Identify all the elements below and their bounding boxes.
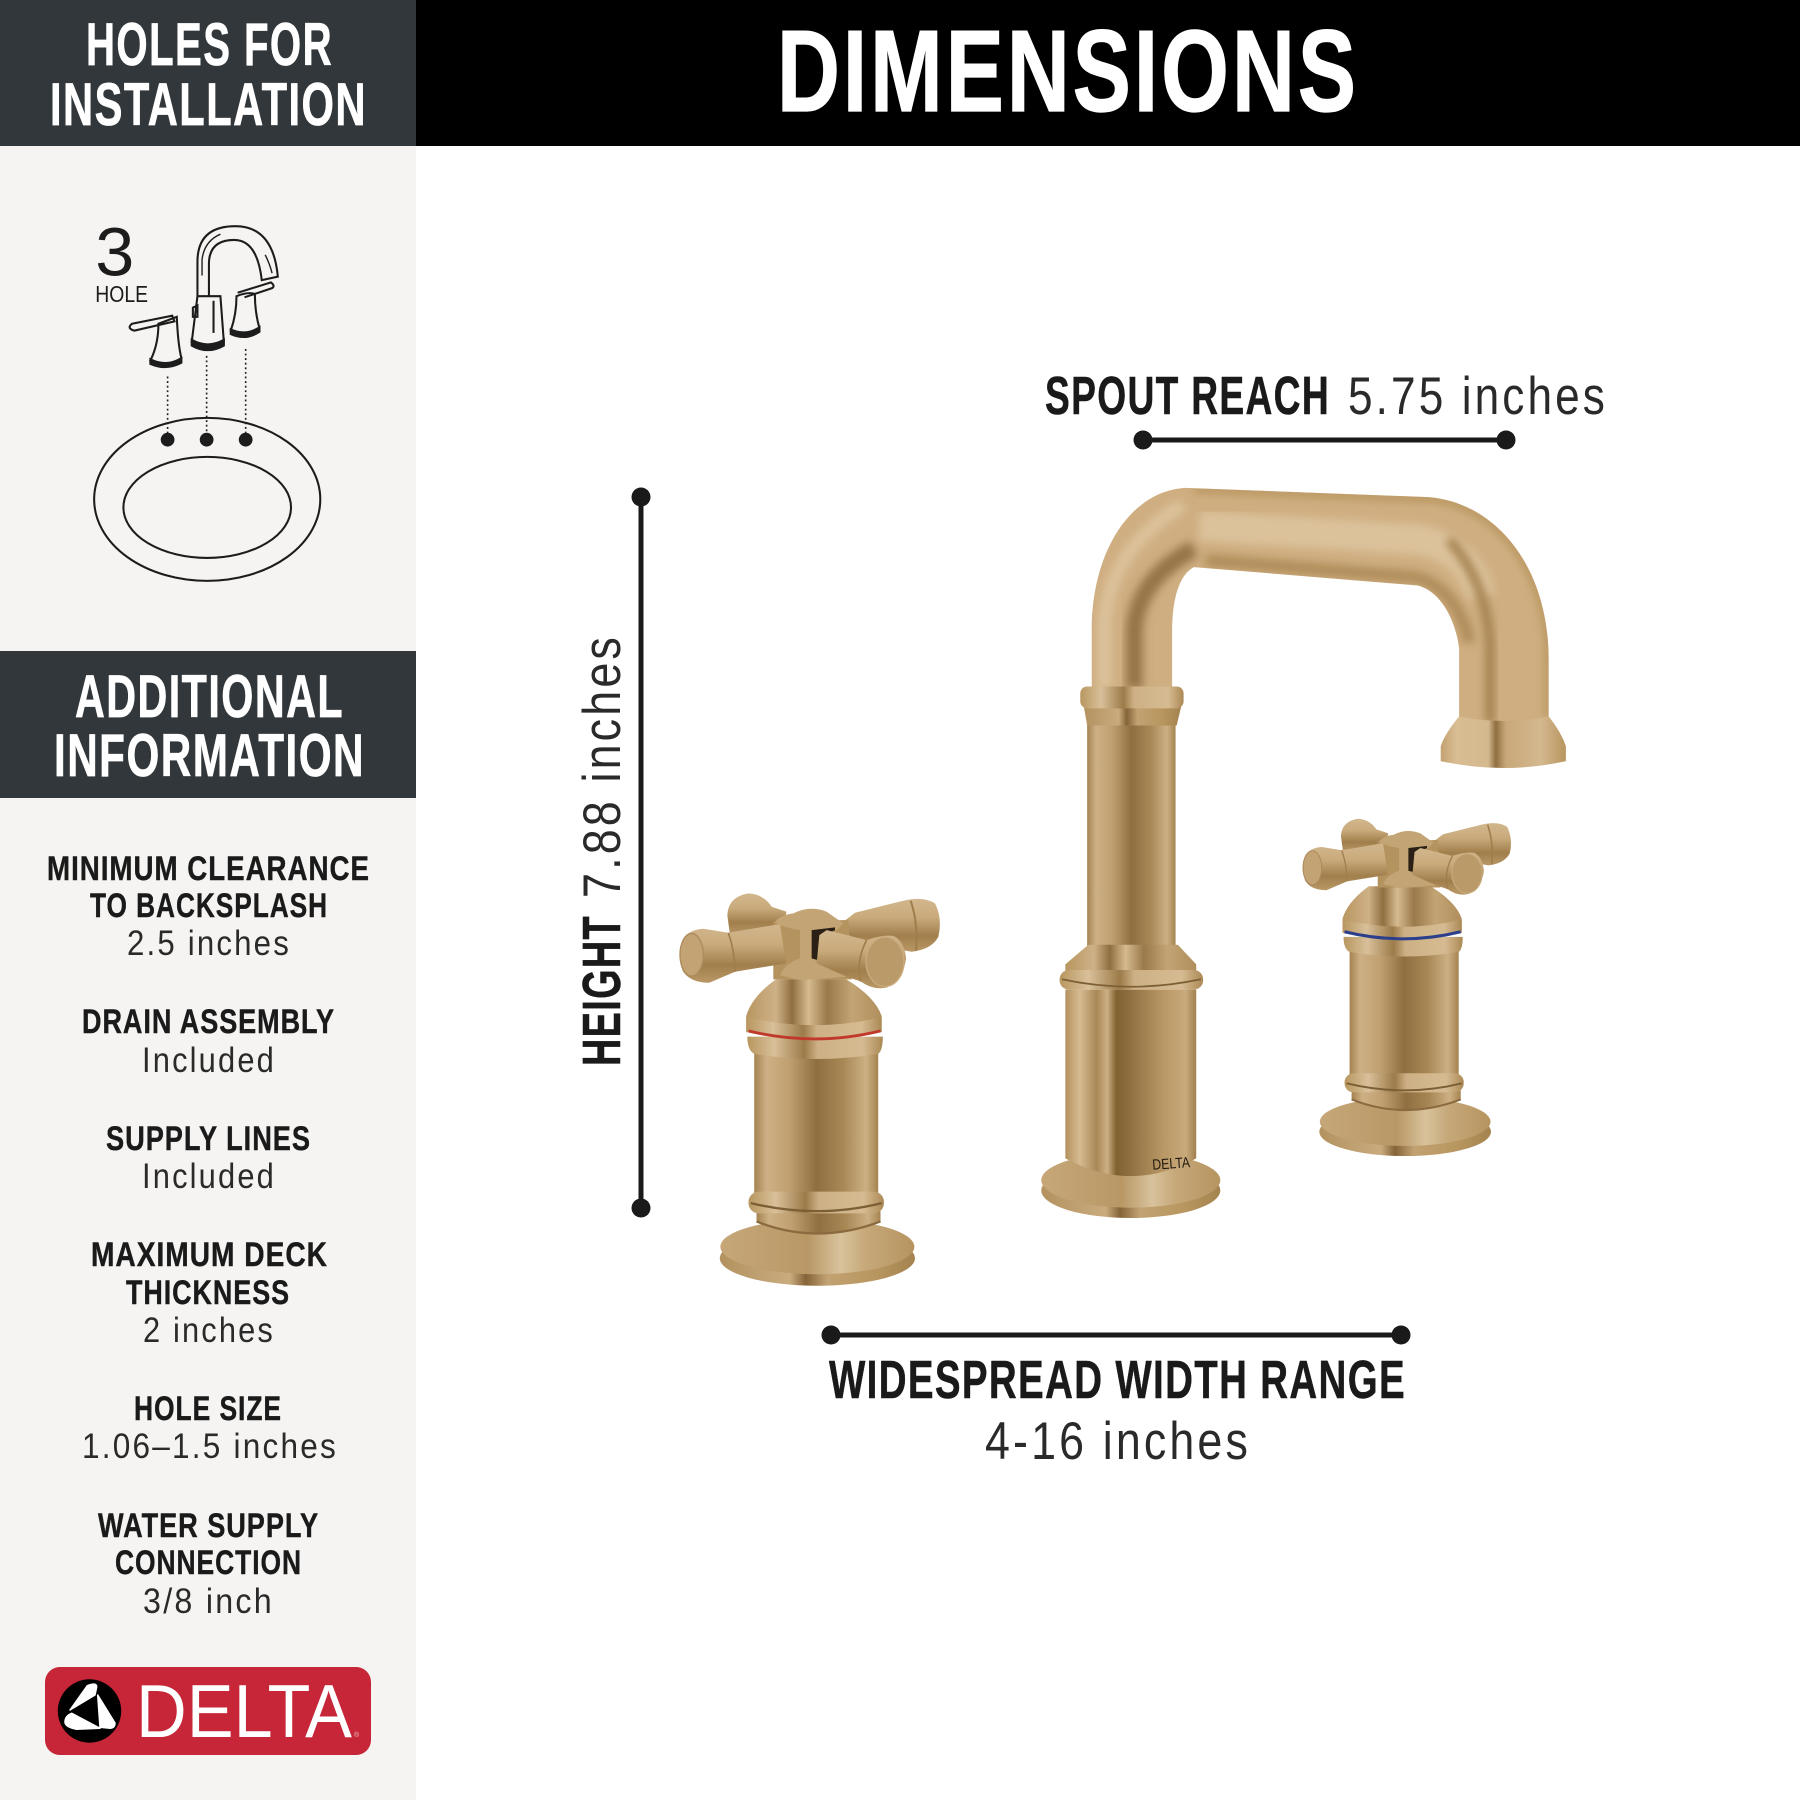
dimension: widespread width range: [822, 1326, 1410, 1471]
icon: mini right handle: [231, 282, 274, 337]
spec: drain assembly: DRAIN ASSEMBLY: [82, 1003, 335, 1041]
dimension: spout reach: [1045, 366, 1608, 450]
label: 3 hole: [95, 214, 148, 307]
spec: maximum deck thickness: [91, 1236, 328, 1350]
dotted guide lines: [168, 349, 246, 434]
heading: additional information: ADDITIONAL: [75, 663, 344, 730]
dimension: widespread width range: 4-16 inches: [985, 1412, 1251, 1471]
label: 3 hole: 3: [95, 214, 134, 291]
logo: delta: DELTA: [136, 1669, 352, 1753]
heading: additional information: INFORMATION: [54, 722, 365, 789]
spec: minimum clearance: [47, 850, 370, 963]
spec: water supply connection: 3/8 inch: [143, 1582, 274, 1621]
spec: maximum deck thickness: THICKNESS: [126, 1274, 290, 1312]
logo: delta: [45, 1667, 371, 1755]
spec: drain assembly: [82, 1003, 335, 1080]
spec: minimum clearance: MINIMUM CLEARANCE: [47, 850, 370, 888]
label: 3 hole: HOLE: [95, 281, 148, 307]
spec: maximum deck thickness: MAXIMUM DECK: [91, 1236, 328, 1274]
center body: DELTA: [1152, 1154, 1191, 1174]
spec: minimum clearance: TO BACKSPLASH: [90, 887, 328, 925]
heading: additional information: [0, 651, 416, 798]
left cross handle: [680, 893, 940, 988]
heading: holes for installation: INSTALLATION: [50, 71, 367, 138]
panel: left sidebar: [0, 0, 416, 1800]
heading: holes for installation: [0, 0, 416, 146]
spec: supply lines: Included: [142, 1157, 276, 1196]
icon: sink outline: [94, 418, 320, 581]
logo: delta: ®: [354, 1731, 360, 1739]
spec: water supply connection: [98, 1507, 319, 1621]
center spout: [1092, 488, 1566, 768]
spec: hole size: 1.06–1.5 inches: [82, 1427, 338, 1466]
dimension: height: [572, 488, 650, 1218]
right handle body: [1319, 886, 1491, 1156]
center body: [1041, 687, 1220, 1218]
dimension: widespread width range: WIDESPREAD WIDTH RANGE: [829, 1350, 1406, 1410]
spec: water supply connection: CONNECTION: [115, 1544, 302, 1582]
spec: hole size: [82, 1390, 338, 1466]
dimension: spout reach: 5.75 inches: [1348, 367, 1608, 426]
spec: hole size: HOLE SIZE: [134, 1390, 282, 1428]
spec: water supply connection: WATER SUPPLY: [98, 1507, 319, 1545]
spec: maximum deck thickness: 2 inches: [143, 1311, 275, 1350]
icon: mini left handle: [130, 316, 181, 367]
spec list: [47, 850, 370, 1621]
icon: three hole faucet and sink diagram: [94, 214, 320, 581]
right cross handle: [1303, 819, 1511, 895]
dimension: spout reach: SPOUT REACH: [1045, 366, 1330, 426]
title banner: dimensions: DIMENSIONS: [777, 6, 1359, 136]
icon: mini spout: [192, 226, 278, 350]
spec: drain assembly: Included: [142, 1041, 276, 1080]
spec: supply lines: [106, 1120, 311, 1196]
spec: supply lines: SUPPLY LINES: [106, 1120, 311, 1158]
dimension: height: 7.88 inches: [573, 634, 632, 898]
dimension: height: HEIGHT: [572, 915, 632, 1066]
heading: holes for installation: HOLES FOR: [86, 11, 333, 78]
spec: minimum clearance: 2.5 inches: [127, 924, 291, 963]
left handle body: [720, 979, 915, 1286]
icon: mounting holes: [161, 433, 253, 447]
title banner: dimensions: [416, 0, 1800, 146]
illustration: brass widespread faucet: [680, 488, 1566, 1286]
